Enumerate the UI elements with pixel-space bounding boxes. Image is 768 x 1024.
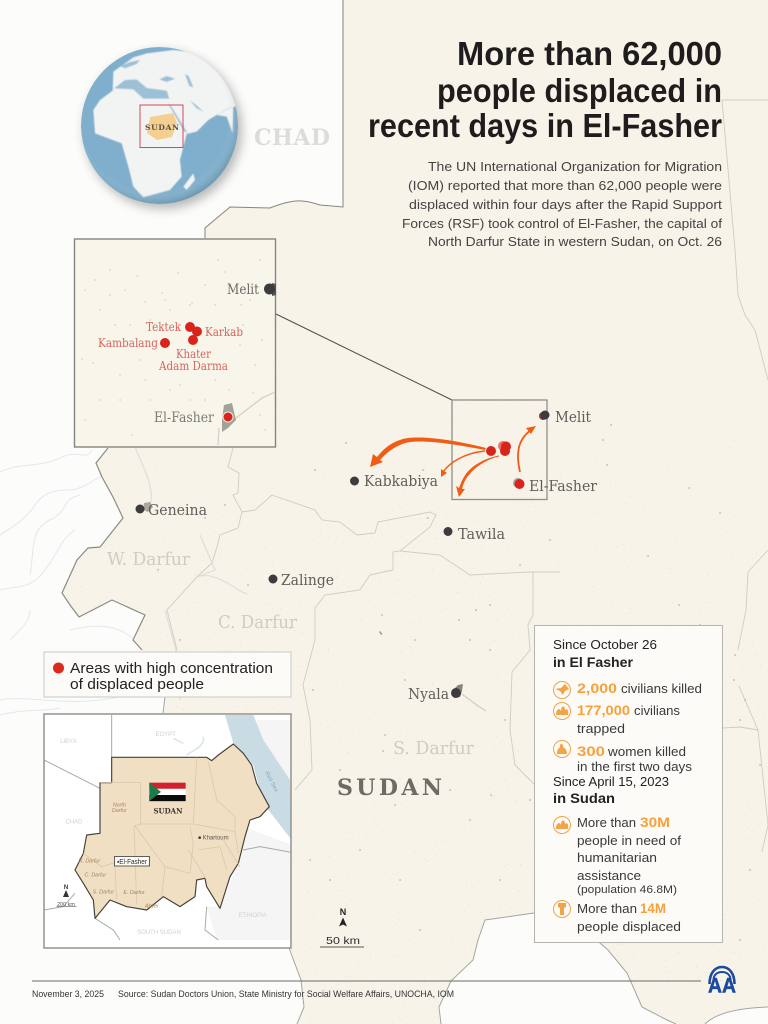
stat: women killed	[554, 740, 692, 774]
map: rivers in Sudan	[135, 447, 247, 700]
logo: Anadolu Agency: AA	[708, 974, 736, 998]
stat: civilians trapped: 177,000	[577, 702, 630, 718]
stat: people displaced: people displaced	[577, 920, 681, 934]
panel: Sudan locator map: Abyei	[144, 903, 159, 909]
north arrow and scale: 200 km	[57, 902, 75, 908]
footer: date and source: Source: Sudan Doctors Union, State Ministry for Social Welfare Affairs, UNOCHA, IOM	[118, 989, 454, 999]
stat: people displaced	[554, 900, 681, 934]
globe land: Africa and Eurasia	[93, 50, 240, 197]
Nile in Egypt	[173, 737, 203, 755]
north arrow and scale: N	[64, 885, 68, 891]
displacement sites: Karkab	[205, 324, 243, 339]
heading: Sudan: in Sudan	[553, 790, 615, 806]
region labels: C. Darfur	[218, 612, 297, 633]
arrow: to Kabkabiya	[370, 437, 486, 467]
locator box on main map	[452, 400, 547, 500]
panel: Sudan locator map: Khartoum	[203, 836, 229, 842]
legend: of displaced people	[70, 677, 204, 693]
connector line between zoom box and inset	[276, 314, 452, 400]
globe shading	[113, 94, 238, 204]
red dots: sites on main map	[486, 441, 511, 456]
city: El-Fasher: El-Fasher	[529, 477, 598, 495]
panel: Sudan locator map: E. Darfur	[123, 890, 145, 896]
intro text: displaced within four days after the Rapid Support	[409, 198, 723, 212]
panel: Sudan locator map: SUDAN	[153, 807, 183, 816]
north arrow and scale	[56, 885, 76, 908]
map: settlement speckles	[158, 395, 760, 940]
panel: Sudan locator map: C. Darfur	[85, 873, 106, 879]
stat: civilians killed: civilians killed	[621, 682, 702, 696]
map: western border line	[62, 448, 145, 650]
panel: Sudan locator map: CHAD	[66, 820, 83, 826]
road east of El-Fasher	[218, 392, 275, 445]
stat: people in need	[554, 814, 682, 896]
map: Chad border line	[205, 0, 343, 238]
stat: civilians trapped	[554, 702, 680, 736]
panel: Sudan locator map: S. Darfur	[93, 890, 114, 896]
intro text: Forces (RSF) took control of El-Fasher, the capital of	[402, 217, 723, 231]
region labels: W. Darfur	[107, 549, 190, 570]
heading: El Fasher: in El Fasher	[553, 654, 634, 670]
map: fine speckle texture	[64, 358, 768, 1024]
state borders	[83, 757, 240, 903]
stat: people in need: More than	[577, 816, 636, 830]
stat: civilians killed: 2,000	[577, 680, 617, 696]
title: people displaced in	[437, 72, 722, 109]
region labels: S. Darfur	[393, 738, 474, 759]
displacement sites	[98, 319, 243, 373]
globe label: SUDAN	[145, 123, 179, 132]
stat: women killed: in the first two days	[577, 760, 692, 774]
panel: Sudan locator map	[44, 714, 297, 948]
El-Fasher label tag: ▪El-Fasher	[117, 859, 148, 866]
heading: El Fasher: Since October 26	[553, 637, 657, 652]
globe shadow	[84, 51, 242, 209]
city: Nyala	[408, 684, 486, 711]
region labels	[107, 549, 474, 759]
map: state borders	[167, 100, 768, 852]
north arrow and map scale	[320, 907, 364, 947]
panel: Sudan locator map: Red Sea	[263, 771, 279, 794]
city: Kabkabiya: Kabkabiya	[364, 472, 438, 490]
displacement sites: Kambalang	[98, 335, 158, 350]
north arrow and map scale: 50 km	[326, 935, 360, 947]
panel: Sudan locator map: SOUTH SUDAN	[137, 930, 181, 936]
Ethiopia terrain	[207, 827, 297, 940]
Sudan shape	[75, 744, 269, 918]
displacement sites: Tektek	[146, 319, 181, 334]
panel: Sudan locator map: N. Darfur	[79, 859, 100, 865]
heading: Sudan	[553, 774, 669, 806]
intro text	[402, 160, 723, 249]
panel: El-Fasher zoom inset	[74, 239, 276, 447]
stat: women killed: women killed	[607, 745, 686, 759]
panel: Sudan locator map: North	[113, 802, 126, 808]
title	[368, 35, 722, 144]
globe locator box	[140, 105, 183, 148]
label: Chad: CHAD	[254, 125, 330, 151]
map: rivers in Chad	[0, 450, 165, 715]
intro text: (IOM) reported that more than 62,000 people were	[408, 179, 722, 193]
stat: civilians trapped: civilians	[634, 704, 680, 718]
arrow: thin south-west	[441, 451, 485, 477]
neighbour borders	[44, 715, 297, 940]
city: Geneina: Geneina	[148, 501, 207, 519]
flag of Sudan	[149, 783, 186, 801]
stat: people displaced: 14M	[640, 900, 666, 916]
heading: El Fasher	[553, 637, 657, 670]
stat: women killed: 300	[577, 743, 605, 759]
city: Zalinge: Zalinge	[281, 571, 334, 589]
legend	[44, 652, 291, 697]
panel: Sudan locator map: EGYPT	[156, 732, 176, 738]
inset speckles	[82, 260, 265, 435]
stat: people in need: assistance	[577, 869, 641, 883]
title: recent days in El-Fasher	[368, 107, 722, 144]
city: Melit	[539, 408, 591, 426]
legend: Areas with high concentration	[70, 661, 273, 677]
stat: people in need: (population 46.8M)	[577, 884, 677, 896]
stat: people in need: 30M	[640, 814, 670, 830]
footer: date and source: November 3, 2025	[32, 989, 104, 999]
panel: Sudan locator map: Darfur	[112, 808, 127, 814]
arrow: El-Fasher to Melit	[518, 426, 536, 472]
panel: Sudan locator map: ETHIOPIA	[239, 913, 267, 919]
stat: people in need: people in need of	[577, 834, 682, 848]
city: Melit: Melit	[227, 282, 260, 298]
stat: civilians killed	[554, 680, 702, 698]
arrow: south	[456, 456, 499, 497]
panel: Sudan locator map: LIBYA	[60, 739, 77, 745]
city: Tawila: Tawila	[458, 525, 505, 543]
city: Nyala: Nyala	[408, 685, 449, 703]
displacement sites: Khater	[176, 346, 211, 361]
label: Sudan: SUDAN	[337, 775, 442, 801]
north arrow and map scale: N	[340, 907, 346, 917]
Red Sea	[225, 715, 292, 840]
globe	[81, 47, 242, 209]
displacement sites: Adam Darma	[158, 358, 228, 373]
intro text: The UN International Organization for Migration	[428, 160, 722, 174]
city: El-Fasher	[154, 403, 236, 432]
stat: civilians trapped: trapped	[577, 722, 625, 736]
El-Fasher label tag	[114, 856, 150, 866]
globe seas	[114, 60, 203, 133]
Sudan on globe	[147, 113, 177, 140]
stat: people displaced: More than	[577, 902, 637, 916]
globe sphere	[81, 47, 240, 204]
heading: Sudan: Since April 15, 2023	[553, 774, 669, 789]
city: El-Fasher: El-Fasher	[154, 410, 214, 426]
intro text: North Darfur State in western Sudan, on Oct. 26	[428, 235, 722, 249]
stat: people in need: humanitarian	[577, 851, 657, 865]
map: southern border lines	[163, 697, 768, 1024]
panel: statistics	[534, 626, 722, 942]
footer rule	[32, 980, 701, 982]
city: Melit: Melit	[555, 408, 591, 426]
title: More than 62,000	[457, 35, 722, 72]
